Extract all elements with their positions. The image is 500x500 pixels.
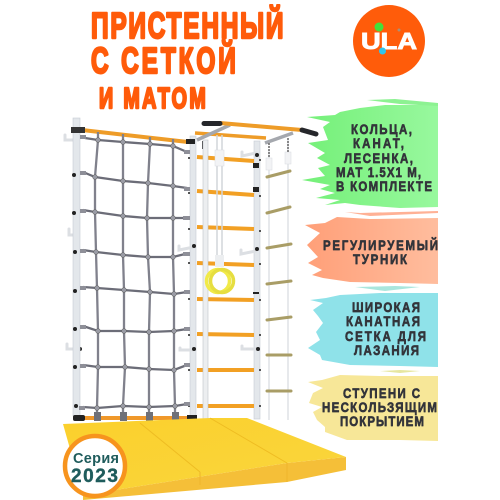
rope net <box>79 132 190 418</box>
panel: included accessories <box>302 99 438 208</box>
panel: included accessories: МАТ 1.5Х1 М, <box>336 164 421 180</box>
climbing rope <box>203 140 208 421</box>
panel: non-slip steps: СТУПЕНИ С <box>343 385 420 401</box>
title <box>91 4 283 115</box>
gymnastic rings <box>206 135 234 292</box>
panel: non-slip steps: ПОКРЫТИЕМ <box>340 413 424 429</box>
badge: series 2023: Серия <box>73 451 119 467</box>
panel: wide rope net: КАНАТНАЯ <box>346 313 420 329</box>
panel: wide rope net: ШИРОКАЯ <box>352 299 420 315</box>
logo: ULA: ULA <box>361 28 417 54</box>
title: С СЕТКОЙ <box>91 39 236 81</box>
pull-up bar <box>197 123 316 149</box>
logo: ULA <box>353 5 425 77</box>
panel: included accessories: ЛЕСЕНКА, <box>344 150 413 166</box>
panel: adjustable pull-up bar <box>305 211 438 284</box>
panel: non-slip steps: НЕСКОЛЬЗЯЩИМ <box>322 399 437 415</box>
bottom bar of net <box>73 412 197 421</box>
panel: included accessories: КОЛЬЦА, <box>351 121 412 137</box>
badge: series 2023: 2023 <box>71 466 118 487</box>
yellow mat <box>63 418 346 500</box>
wall brackets <box>65 135 260 351</box>
wall bars section <box>188 133 266 420</box>
panel: wide rope net: ЛАЗАНИЯ <box>354 342 419 358</box>
left post <box>71 118 195 416</box>
title: ПРИСТЕННЫЙ <box>91 4 283 46</box>
rope ladder <box>266 138 291 420</box>
panel: wide rope net <box>308 286 438 367</box>
panel: non-slip steps <box>308 370 438 441</box>
panel: included accessories: КАНАТ, <box>353 135 404 151</box>
panel: wide rope net: СЕТКА ДЛЯ <box>345 328 426 344</box>
badge: series 2023 <box>65 436 125 496</box>
panel: adjustable pull-up bar: ТУРНИК <box>353 251 407 267</box>
title: И МАТОМ <box>99 83 206 115</box>
panel: included accessories: В КОМПЛЕКТЕ <box>336 178 432 194</box>
panel: adjustable pull-up bar: РЕГУЛИРУЕМЫЙ <box>323 237 438 253</box>
